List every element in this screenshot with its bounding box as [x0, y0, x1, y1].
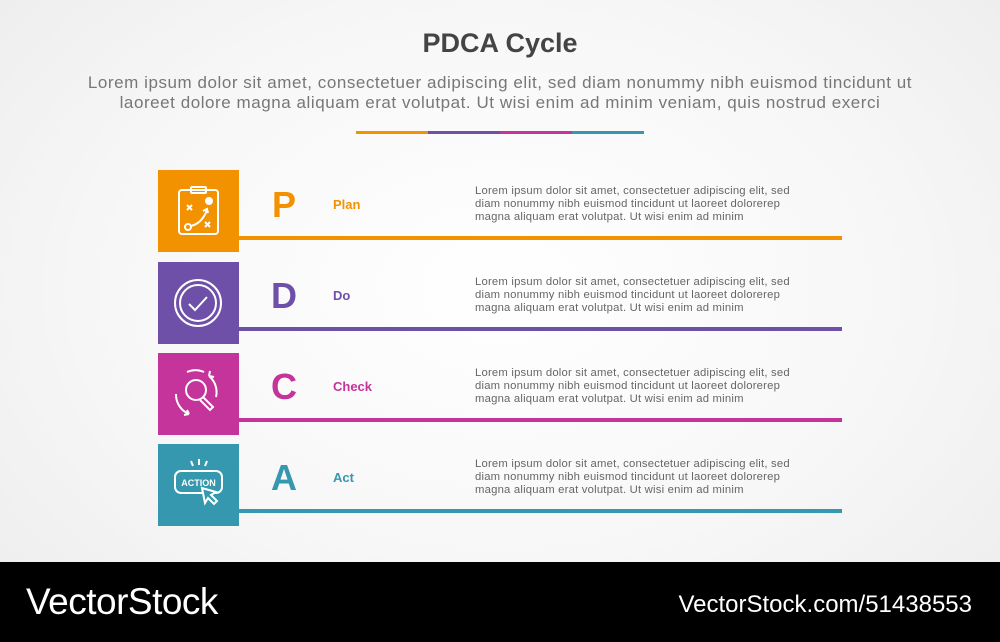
label plan: Plan [333, 197, 360, 212]
footer logo: VectorStock [26, 581, 218, 622]
desc do: Lorem ipsum dolor sit amet, consectetuer adipiscing elit, sed [475, 276, 790, 288]
subtitle [88, 73, 912, 112]
label do: Do [333, 288, 350, 303]
desc do [475, 276, 790, 314]
desc check [475, 367, 790, 405]
footer id: VectorStock.com/51438553 [678, 591, 972, 618]
row: do [158, 262, 239, 344]
letter A: A [271, 457, 297, 498]
letter D: D [271, 275, 297, 316]
row: plan [158, 170, 239, 252]
divider [356, 131, 644, 134]
desc act [475, 458, 790, 496]
label act: Act [333, 470, 354, 485]
desc plan: Lorem ipsum dolor sit amet, consectetuer adipiscing elit, sed [475, 185, 790, 197]
desc plan [475, 185, 790, 223]
desc act: diam nonummy nibh euismod tincidunt ut laoreet dolorerep [475, 471, 780, 483]
label check: Check [333, 379, 372, 394]
desc plan: diam nonummy nibh euismod tincidunt ut laoreet dolorerep [475, 198, 780, 210]
letter P: P [272, 184, 296, 225]
desc check: diam nonummy nibh euismod tincidunt ut laoreet dolorerep [475, 380, 780, 392]
desc act: Lorem ipsum dolor sit amet, consectetuer adipiscing elit, sed [475, 458, 790, 470]
subtitle: laoreet dolore magna aliquam erat volutpat. Ut wisi enim ad minim veniam, quis nostrud exerci [120, 93, 880, 112]
row: act: ACTION [181, 478, 216, 488]
desc do: diam nonummy nibh euismod tincidunt ut laoreet dolorerep [475, 289, 780, 301]
desc plan: magna aliquam erat volutpat. Ut wisi enim ad minim [475, 211, 744, 223]
row: act [158, 444, 239, 526]
row: check [158, 353, 239, 435]
title: PDCA Cycle [422, 28, 578, 58]
footer band [0, 562, 1000, 642]
letter C: C [271, 366, 297, 407]
desc check: Lorem ipsum dolor sit amet, consectetuer adipiscing elit, sed [475, 367, 790, 379]
desc check: magna aliquam erat volutpat. Ut wisi enim ad minim [475, 393, 744, 405]
subtitle: Lorem ipsum dolor sit amet, consectetuer adipiscing elit, sed diam nonummy nibh euismod tincidunt ut [88, 73, 912, 92]
desc act: magna aliquam erat volutpat. Ut wisi enim ad minim [475, 484, 744, 496]
desc do: magna aliquam erat volutpat. Ut wisi enim ad minim [475, 302, 744, 314]
